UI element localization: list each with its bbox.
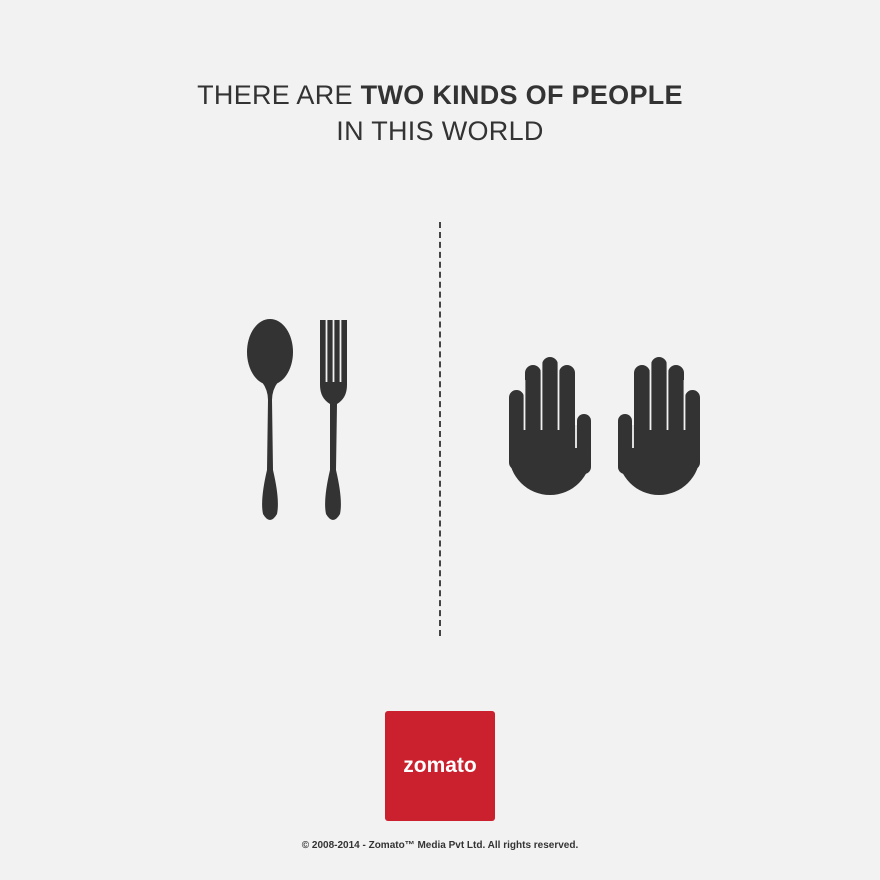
logo [385,711,495,821]
icon: fork [320,318,347,520]
title [197,80,683,146]
icon: spoon [247,319,293,520]
logo: zomato [403,754,477,777]
icon: right hand [618,357,700,495]
title: THERE ARE TWO KINDS OF PEOPLE [197,80,683,110]
title: IN THIS WORLD [336,116,544,146]
icon: left hand [509,357,591,495]
divider [439,222,441,636]
footer: © 2008-2014 - Zomato™ Media Pvt Ltd. All rights reserved. [302,840,578,851]
